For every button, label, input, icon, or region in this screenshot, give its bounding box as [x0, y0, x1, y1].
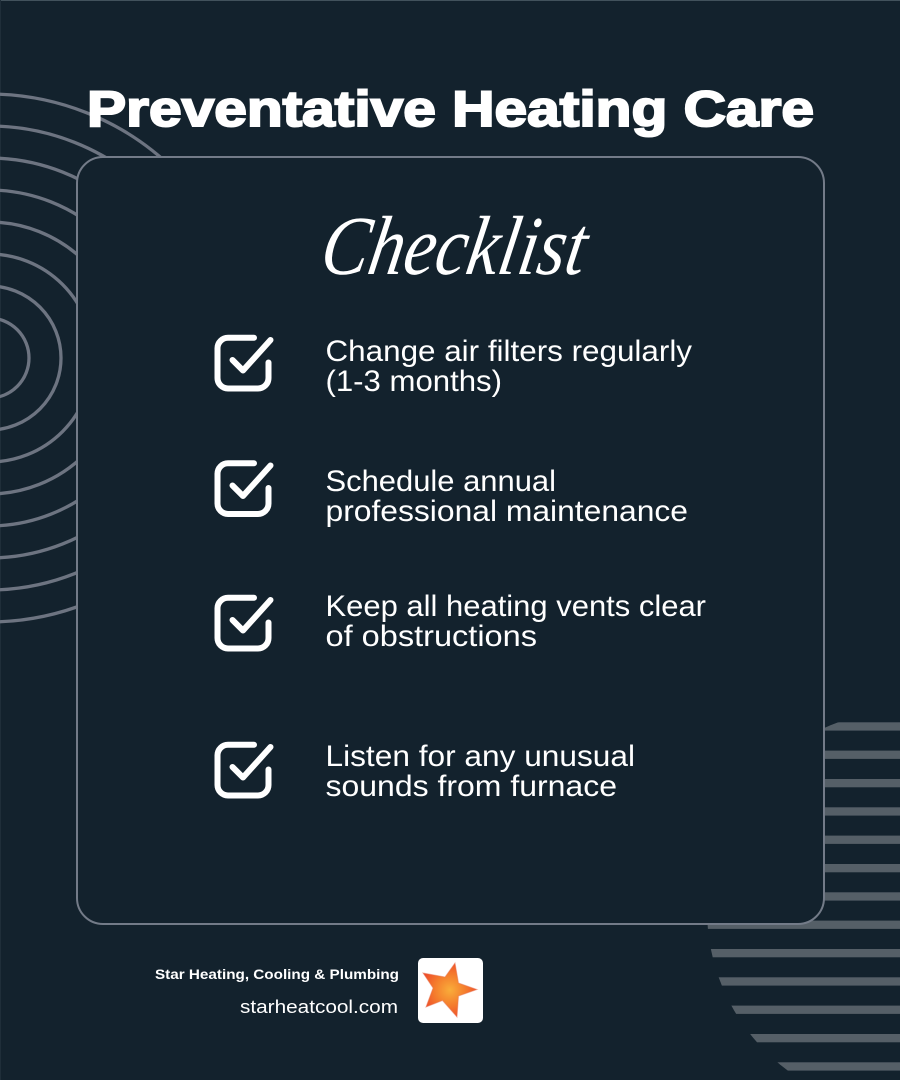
checklist item 1	[218, 335, 692, 398]
decorative concentric arcs	[0, 94, 253, 622]
icon: checkbox 3	[218, 598, 270, 648]
text: item 2: Schedule annual	[326, 465, 556, 498]
text: item 4	[326, 740, 635, 803]
checklist item 4	[218, 740, 635, 803]
icon: checkbox 1	[218, 338, 270, 388]
text: item 2: professional maintenance	[326, 495, 688, 528]
footer: website: starheatcool.com	[240, 997, 398, 1017]
icon: checkbox 4	[218, 745, 270, 796]
icon: checkbox 2	[218, 463, 270, 514]
title: Preventative Heating Care	[87, 81, 814, 137]
text: item 1: Change air filters regularly	[326, 335, 692, 368]
footer: company name: Star Heating, Cooling & Plumbing	[155, 966, 399, 982]
text: item 3: Keep all heating vents clear	[326, 590, 706, 623]
icon: company star logo	[418, 958, 483, 1023]
text: item 1: (1-3 months)	[326, 365, 502, 398]
text: item 1	[326, 335, 692, 398]
checklist item 3	[218, 590, 706, 653]
checklist item 2	[218, 463, 688, 528]
panel: checklist card	[77, 157, 824, 924]
text: item 3: of obstructions	[326, 620, 537, 653]
text: item 4: Listen for any unusual	[326, 740, 635, 773]
heading: Checklist: Checklist	[315, 201, 597, 293]
text: item 3	[326, 590, 706, 653]
text: item 4: sounds from furnace	[326, 770, 617, 803]
text: item 2	[326, 465, 688, 528]
decorative striped circle	[700, 722, 900, 1071]
